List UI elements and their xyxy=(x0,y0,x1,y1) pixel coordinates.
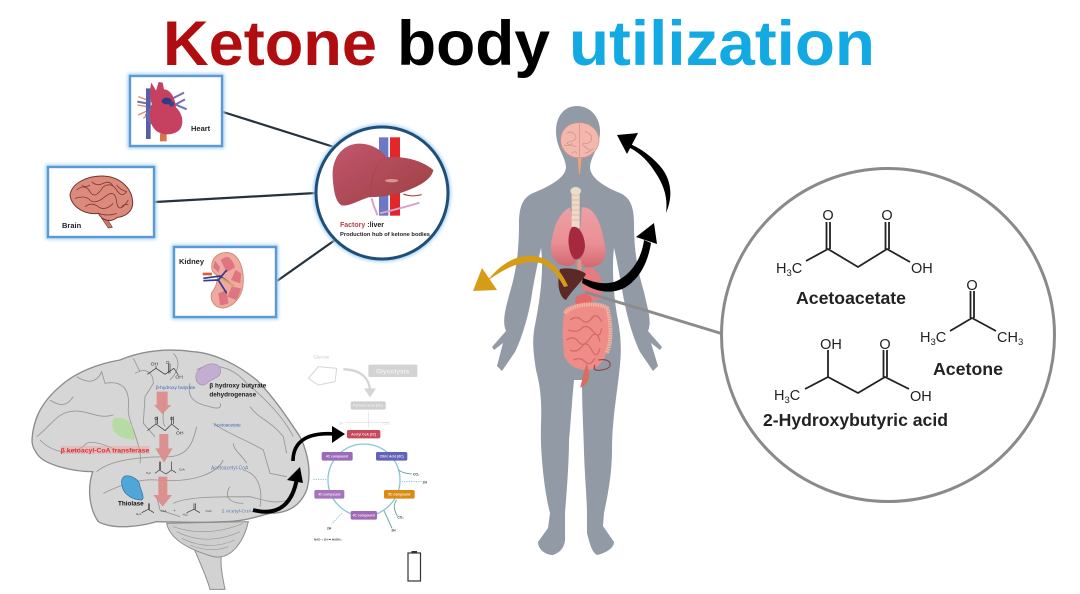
molecule: 2-hydroxybutyric acid: O xyxy=(879,337,891,353)
molecule structures xyxy=(142,363,200,513)
brain diagram: OH xyxy=(151,361,159,367)
brain diagram: O xyxy=(154,416,158,421)
brain diagram: O xyxy=(166,360,170,365)
enzyme label: dehydrogenase: β hydroxy butyrate xyxy=(209,382,267,389)
label: heart: Heart xyxy=(191,124,211,133)
molecule: acetoacetate: Acetoacetate xyxy=(796,288,906,308)
brain diagram: H₃C xyxy=(146,471,151,475)
organ: intestines xyxy=(563,293,611,386)
cycle small labels: 2H xyxy=(327,526,332,530)
brain diagram: H₃C xyxy=(183,512,189,516)
icon: brain xyxy=(70,176,133,228)
brain diagram: H₃C xyxy=(136,512,142,516)
Krebs cycle diagram xyxy=(308,355,428,542)
enzyme: transferase xyxy=(112,418,135,440)
panel: brain xyxy=(48,167,154,237)
molecule: acetoacetate: C xyxy=(792,261,802,277)
glycolysis faded: 2H xyxy=(339,421,344,425)
cerebellum xyxy=(167,522,248,557)
cycle small labels: NAD + 2H ➡ NADH₂ xyxy=(314,538,342,542)
molecule: acetoacetate: OH xyxy=(911,261,933,277)
molecule: acetone: 3 xyxy=(1018,337,1023,348)
cerebrum outline xyxy=(32,350,309,527)
molecule: acetone: 3 xyxy=(930,337,936,348)
label: production hub: Production hub of ketone bodies xyxy=(340,232,430,238)
title: body xyxy=(397,9,550,79)
panel: liver factory xyxy=(316,127,448,259)
organ: liver xyxy=(558,268,586,300)
label: kidney: Kidney xyxy=(179,257,205,266)
icon: liver xyxy=(333,137,433,216)
title xyxy=(163,9,875,79)
panel: heart xyxy=(130,76,222,146)
cycle side branches xyxy=(384,470,412,528)
molecule: 2-hydroxybutyric acid: 2-Hydroxybutyric acid xyxy=(763,410,948,430)
pathway labels xyxy=(156,385,252,514)
glycolysis faded: Glycolysis xyxy=(376,368,410,375)
pathway labels: β-hydroxy butyrate xyxy=(156,385,196,390)
icon: kidney xyxy=(203,253,243,308)
connector lines: organs to liver xyxy=(155,112,335,281)
pointer line to molecules xyxy=(585,292,723,334)
brain diagram: OH xyxy=(176,430,184,436)
icon: heart xyxy=(137,82,187,141)
compound boxes: Citric Acid (6C) xyxy=(380,455,404,459)
molecule: acetoacetate: 3 xyxy=(786,268,792,279)
cycle ring xyxy=(328,444,400,516)
panel: ketone bodies molecules xyxy=(722,168,1054,502)
sulci xyxy=(37,353,293,517)
enzyme label: transferase: β ketoacyl-CoA transferase xyxy=(61,448,150,455)
molecule: 2-hydroxybutyric acid: OH xyxy=(820,337,842,353)
molecule: 2-hydroxybutyric acid: H xyxy=(774,388,784,404)
molecule: acetone: CH xyxy=(997,330,1018,346)
pathway labels: Acetoacetyl-CoA xyxy=(211,465,249,471)
brain diagram: + xyxy=(173,508,176,513)
cycle small labels: CO₂ xyxy=(413,472,420,476)
enzyme: thiolase xyxy=(122,476,143,500)
brain diagram: CoA xyxy=(206,509,211,513)
brain diagram: CoA xyxy=(161,509,166,513)
compound boxes: 4C compound xyxy=(318,493,340,497)
icon: battery xyxy=(408,551,420,581)
molecule: acetoacetate: O xyxy=(822,208,834,224)
enzyme label: thiolase: Thiolase xyxy=(118,500,144,507)
arrow: liver outward gold xyxy=(473,256,568,291)
title: utilization xyxy=(569,9,875,79)
enzyme label: dehydrogenase: dehydrogenase xyxy=(209,392,257,399)
compound boxes xyxy=(314,452,415,520)
molecule: 2-hydroxybutyric acid: C xyxy=(790,388,800,404)
cycle small labels: 2H xyxy=(391,529,396,533)
acetyl CoA box: Acetyl CoA (2C) xyxy=(351,432,376,436)
body silhouette xyxy=(492,106,662,555)
acetyl CoA box xyxy=(347,430,380,438)
pathway labels: 2 Acetyl-CoA xyxy=(222,508,252,514)
molecule: acetoacetate: O xyxy=(881,208,893,224)
compound boxes: 5C compound xyxy=(388,493,410,497)
molecule: acetone xyxy=(920,278,1023,379)
cycle small labels: 2H xyxy=(423,480,428,484)
cycle small labels xyxy=(314,472,428,542)
molecule: acetoacetate xyxy=(776,208,933,308)
cycle small labels: CO₂ xyxy=(397,516,404,520)
organ: brain and spinal cord xyxy=(561,123,599,174)
brain diagram xyxy=(32,350,309,589)
glycolysis faded: Glucose xyxy=(313,355,330,360)
molecule: acetone: H xyxy=(920,330,930,346)
molecule: acetone: C xyxy=(936,330,946,346)
label: brain: Brain xyxy=(62,221,82,230)
glycolysis faded xyxy=(308,355,417,427)
molecule: 2-hydroxybutyric acid: 3 xyxy=(784,395,790,406)
arrow: acetyl-CoA to cycle xyxy=(253,426,345,512)
pathway arrows xyxy=(153,392,173,507)
brain diagram: OH xyxy=(175,374,183,380)
arrow: to brain black xyxy=(617,133,670,213)
human body xyxy=(473,106,723,555)
compound boxes: 4C compound xyxy=(326,455,348,459)
arrow: liver up black xyxy=(582,223,657,292)
molecule: acetone: O xyxy=(966,278,978,294)
compound boxes: 4C compound xyxy=(353,514,375,518)
molecule: acetone: Acetone xyxy=(933,359,1003,379)
enzyme: dehydrogenase xyxy=(196,364,221,385)
brain diagram: O xyxy=(170,416,174,421)
glycolysis faded: CO₂ xyxy=(383,421,390,425)
molecule: acetoacetate: H xyxy=(776,261,786,277)
molecule: 2-hydroxybutyric acid xyxy=(763,337,948,430)
organ: stomach xyxy=(578,265,606,303)
panel: kidney xyxy=(174,247,276,317)
title: Ketone xyxy=(163,9,377,79)
organ: lungs heart trachea xyxy=(551,187,606,272)
brain stem xyxy=(193,547,225,589)
glycolysis faded: Pyruvic acid (3C) xyxy=(353,404,384,408)
molecule: 2-hydroxybutyric acid: OH xyxy=(910,389,932,405)
pathway labels: Acetoacetate xyxy=(214,423,241,428)
label: factory liver: Factory :liver xyxy=(340,222,384,229)
brain diagram: CoA xyxy=(179,468,185,472)
